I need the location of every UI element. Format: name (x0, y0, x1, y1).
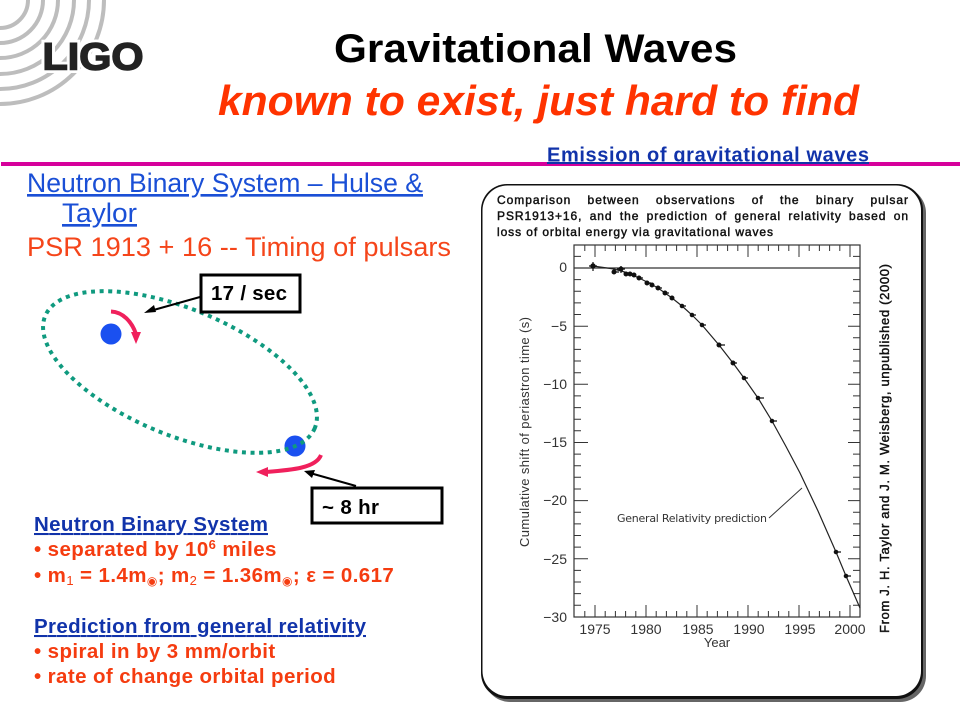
caption: PSR1913+16, and the prediction of general relativity based on (497, 209, 908, 223)
text block: neutron binary system facts: ; m (158, 564, 190, 587)
text block: neutron binary system facts: = 1.36m (197, 564, 282, 587)
x axis tick labels: 2000 (834, 621, 866, 637)
x axis title: Year (704, 635, 731, 650)
caption (497, 193, 908, 239)
caption: loss of orbital energy via gravitational waves (497, 225, 773, 239)
text block: neutron binary system facts: ◉ (282, 574, 293, 588)
caption: Comparison between observations of the binary pulsar (497, 193, 908, 207)
y axis tick labels: −15 (543, 434, 567, 450)
label box: 17 / sec (201, 275, 300, 312)
x axis tick labels (579, 621, 866, 637)
text block: neutron binary system facts: • m (34, 564, 66, 587)
x axis tick labels: 1985 (682, 621, 714, 637)
data points (589, 262, 851, 578)
diagram: binary orbit (21, 258, 339, 486)
y axis tick labels: −10 (543, 376, 567, 392)
text block: neutron binary system facts: 6 (209, 537, 216, 552)
text block: neutron binary system facts: Neutron Binary System (34, 513, 268, 536)
orbit ellipse (21, 258, 339, 486)
x axis tick labels: 1975 (579, 621, 611, 637)
panel: observation chart (481, 184, 926, 702)
label box: 8 hr (312, 488, 442, 523)
text block: prediction from general relativity: • spiral in by 3 mm/orbit (34, 640, 276, 663)
text block: neutron binary system heading: Neutron Binary System – Hulse & (27, 168, 423, 198)
text block: neutron binary system facts: = 1.4m (74, 564, 147, 587)
title: Gravitational Waves (334, 27, 737, 71)
heading underline and divider (1, 162, 960, 166)
x axis tick labels: 1980 (630, 621, 662, 637)
text block: neutron binary system heading (27, 168, 451, 262)
label box: 17 / sec: 17 / sec (211, 282, 287, 305)
text block: prediction from general relativity: • rate of change orbital period (34, 665, 336, 688)
y axis tick labels (543, 259, 567, 625)
text block: neutron binary system heading: PSR 1913 + 16 -- Timing of pulsars (27, 232, 451, 262)
star: lower neutron star (284, 436, 306, 456)
title (218, 27, 860, 124)
arrow: 8 hr pointer (304, 470, 356, 486)
text block: prediction from general relativity (34, 615, 367, 688)
x axis tick labels: 1995 (784, 621, 816, 637)
text block: neutron binary system facts: • separated by 10 (34, 538, 209, 561)
text block: neutron binary system facts: ; ε = 0.617 (293, 564, 394, 587)
logo: LIGO: LIGO (42, 36, 144, 78)
chart heading: emission of gravitational waves: Emission of gravitational waves (547, 144, 869, 166)
text block: neutron binary system facts: miles (216, 538, 277, 561)
panel frame (481, 184, 926, 702)
logo: LIGO: LIGO (42, 36, 144, 78)
title: known to exist, just hard to find (218, 77, 860, 124)
plot frame and ticks (574, 245, 860, 617)
text block: neutron binary system heading: Taylor (62, 198, 137, 228)
text block: neutron binary system facts: 1 (66, 573, 74, 588)
y axis title: Cumulative shift of periastron time (s) (517, 317, 532, 547)
curve: general relativity prediction (593, 266, 860, 608)
logo: LIGO (0, 0, 144, 104)
star: upper neutron star (100, 324, 122, 344)
text block: neutron binary system facts: ◉ (147, 574, 158, 588)
arrow: 17 per sec pointer (144, 297, 200, 313)
y axis tick labels: −20 (543, 492, 567, 508)
arrow: lower rotation (256, 455, 321, 477)
x axis tick labels: 1990 (733, 621, 765, 637)
y axis tick labels: −25 (543, 551, 567, 567)
arrow: upper rotation (111, 312, 141, 344)
y axis tick labels: 0 (559, 259, 567, 275)
annotation: general relativity prediction (617, 488, 802, 525)
text block: prediction from general relativity: Prediction from general relativity (34, 615, 367, 638)
y axis tick labels: −5 (551, 318, 567, 334)
text block: neutron binary system facts (34, 513, 394, 588)
y axis tick labels: −30 (543, 609, 567, 625)
text block: neutron binary system facts: 2 (190, 573, 197, 588)
credit: From J. H. Taylor and J. M. Weisberg, unpublished (2000) (877, 264, 892, 633)
annotation: general relativity prediction: General Relativity prediction (617, 512, 767, 525)
label box: 8 hr: ~ 8 hr (322, 496, 379, 519)
